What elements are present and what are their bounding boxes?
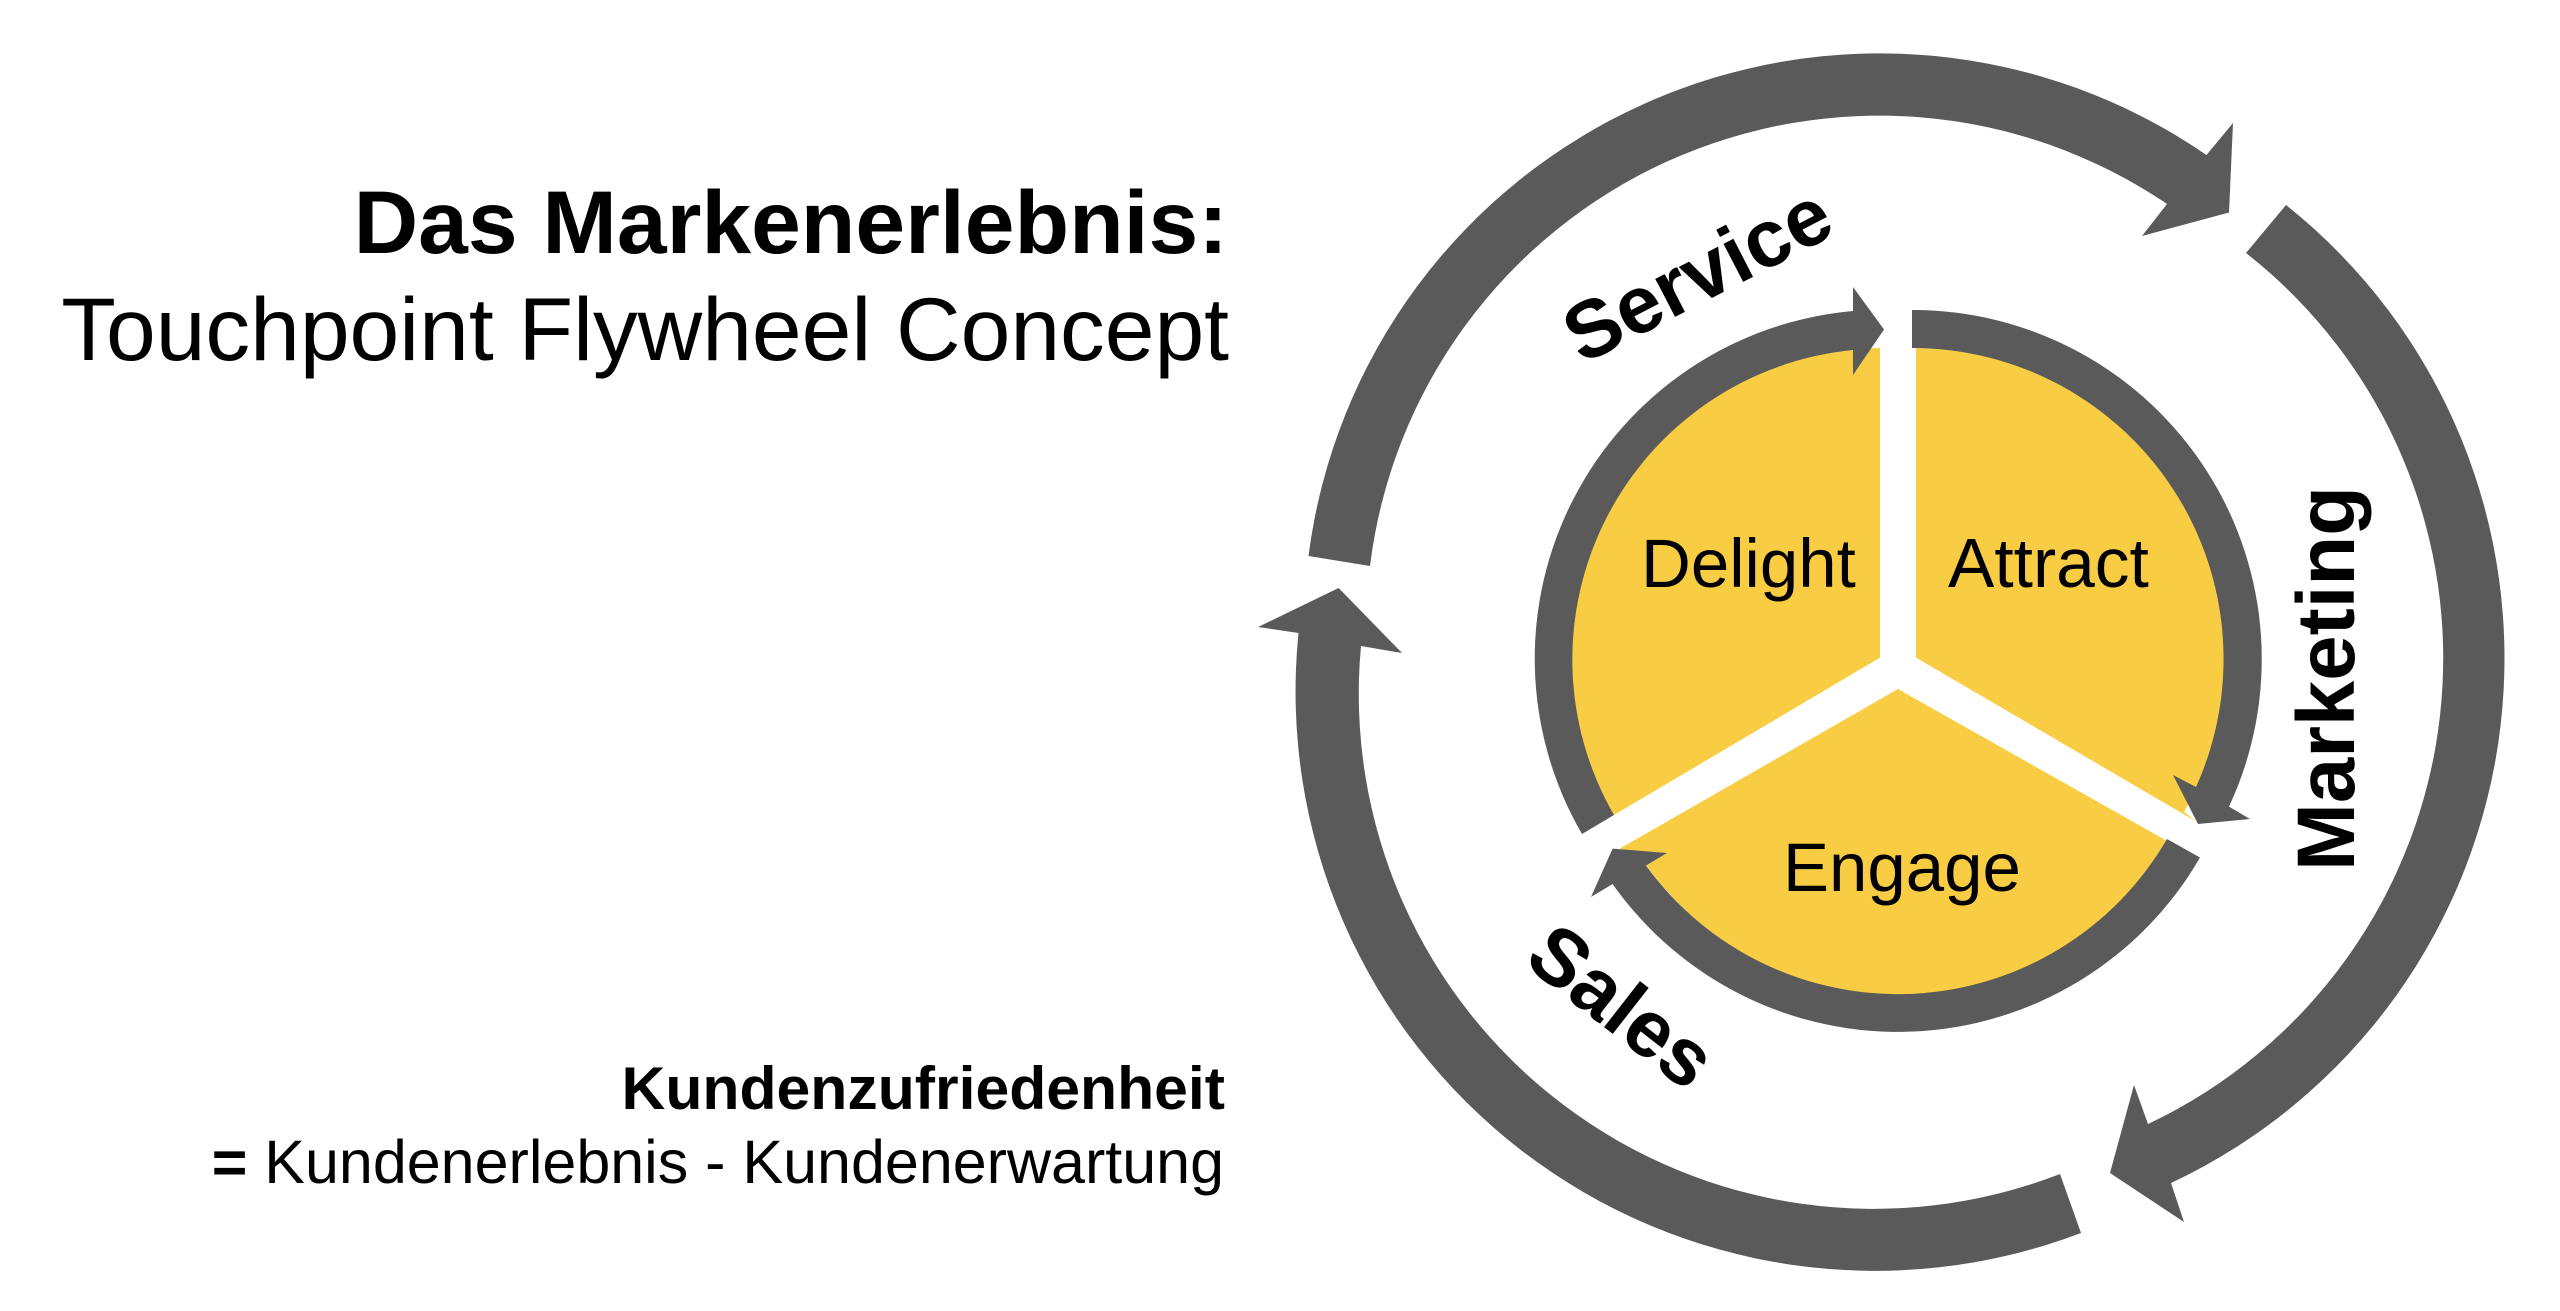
inner arrow: attract	[1912, 310, 2262, 824]
outer arrow: service	[1308, 53, 2233, 566]
formula: customer satisfaction: Kundenzufriedenheit	[622, 1054, 1225, 1122]
formula: customer satisfaction: = Kundenerlebnis - Kundenerwartung	[212, 1128, 1224, 1196]
sector label: attract: Attract	[1948, 524, 2149, 602]
sector: attract	[1916, 348, 2224, 822]
outer label: sales: Sales	[1511, 906, 1732, 1107]
sector label: engage: Engage	[1783, 829, 2021, 906]
title: Touchpoint Flywheel Concept	[61, 279, 1229, 379]
inner arrow: engage	[1591, 839, 2200, 1032]
sector: delight	[1572, 348, 1880, 815]
inner arrow: delight	[1535, 287, 1884, 834]
sector: engage	[1620, 689, 2167, 995]
outer arrow: marketing	[2110, 205, 2504, 1222]
sector label: delight: Delight	[1641, 525, 1856, 602]
outer label: marketing: Marketing	[2281, 486, 2372, 871]
flywheel diagram	[1258, 53, 2504, 1271]
outer label: service: Service	[1549, 169, 1846, 381]
title	[61, 172, 1229, 379]
outer arrow: sales	[1258, 588, 2081, 1271]
formula: customer satisfaction	[212, 1054, 1225, 1196]
title: Das Markenerlebnis:	[354, 172, 1228, 272]
